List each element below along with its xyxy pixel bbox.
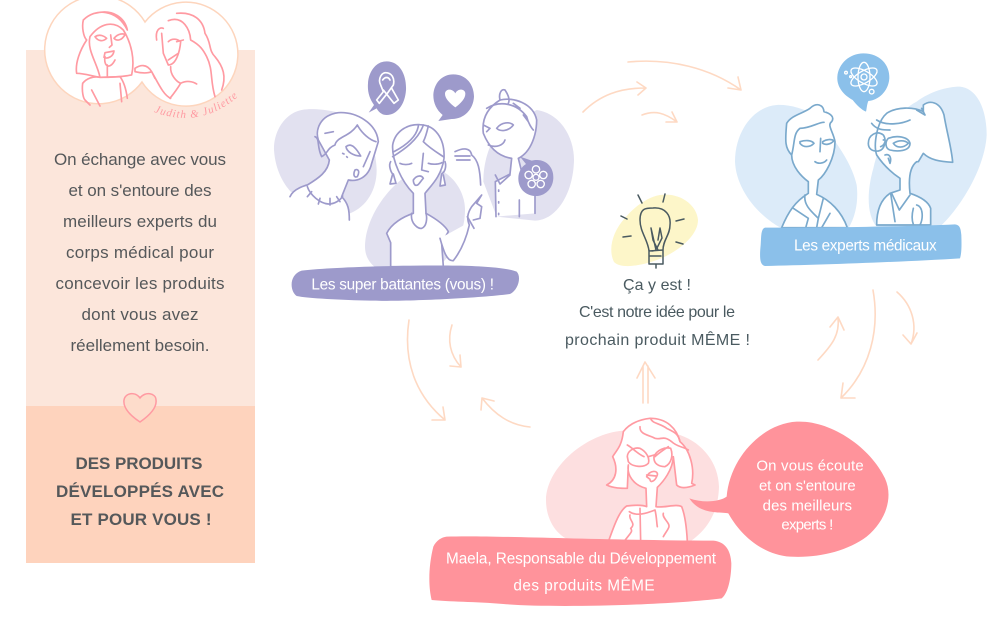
character: male doctor bbox=[782, 105, 847, 228]
label: experts medicaux: Les experts médicaux bbox=[794, 237, 937, 254]
label: super battantes: Les super battantes (vous) ! bbox=[311, 276, 494, 293]
text: idea caption: prochain produit MÊME ! bbox=[565, 330, 750, 349]
label: experts medicaux bbox=[760, 224, 962, 266]
speech bubble: experts ! bbox=[781, 517, 833, 534]
text: intro paragraph: meilleurs experts du bbox=[63, 212, 217, 231]
speech bubble: ribbon bbox=[368, 61, 406, 115]
text: intro paragraph: dont vous avez bbox=[82, 305, 198, 324]
label: Maela: des produits MÊME bbox=[513, 578, 655, 595]
speech bubble: On vous écoute bbox=[756, 458, 864, 475]
group: Maela bbox=[429, 418, 889, 606]
speech bubble bbox=[689, 422, 889, 557]
speech bubble: des meilleurs bbox=[763, 497, 852, 514]
text: intro paragraph: concevoir les produits bbox=[56, 274, 224, 293]
character: female doctor bbox=[868, 102, 953, 225]
text: intro paragraph bbox=[54, 150, 226, 355]
character: left woman bbox=[290, 113, 378, 220]
speech bubble: et on s'entoure bbox=[759, 478, 856, 495]
text: intro paragraph: On échange avec vous bbox=[54, 150, 226, 169]
label: super battantes bbox=[292, 266, 519, 301]
group: experts medicaux bbox=[735, 53, 987, 266]
caption: Judith & Juliette: Judith & Juliette bbox=[154, 93, 237, 118]
icon: heart bbox=[124, 394, 156, 422]
heading: des produits: DÉVELOPPÉS AVEC bbox=[56, 482, 224, 501]
arrows: process cycle bbox=[408, 61, 917, 427]
label: Maela bbox=[429, 536, 731, 606]
idea: light bulb bbox=[611, 194, 698, 268]
panel: founders bbox=[26, 0, 255, 563]
character: centre woman bbox=[387, 125, 482, 267]
text: intro paragraph: corps médical pour bbox=[66, 243, 214, 262]
text: intro paragraph: réellement besoin. bbox=[70, 336, 210, 355]
speech bubble: heart bbox=[433, 74, 474, 121]
text: idea caption: C'est notre idée pour le bbox=[579, 304, 735, 321]
heading: des produits: DES PRODUITS bbox=[76, 454, 202, 473]
text: idea caption: Ça y est ! bbox=[623, 277, 691, 294]
portrait: Judith and Juliette bbox=[45, 0, 238, 106]
character: Maela bbox=[607, 418, 695, 542]
heading: des produits: ET POUR VOUS ! bbox=[70, 510, 212, 529]
text: idea caption bbox=[565, 277, 750, 349]
group: super battantes bbox=[274, 61, 574, 301]
speech bubble: atom bbox=[837, 53, 889, 112]
speech bubble: flower bbox=[518, 157, 553, 196]
heading: des produits bbox=[56, 454, 224, 529]
label: Maela: Maela, Responsable du Développement bbox=[446, 551, 717, 568]
character: right woman bbox=[455, 90, 537, 217]
text: intro paragraph: et on s'entoure des bbox=[68, 181, 212, 200]
